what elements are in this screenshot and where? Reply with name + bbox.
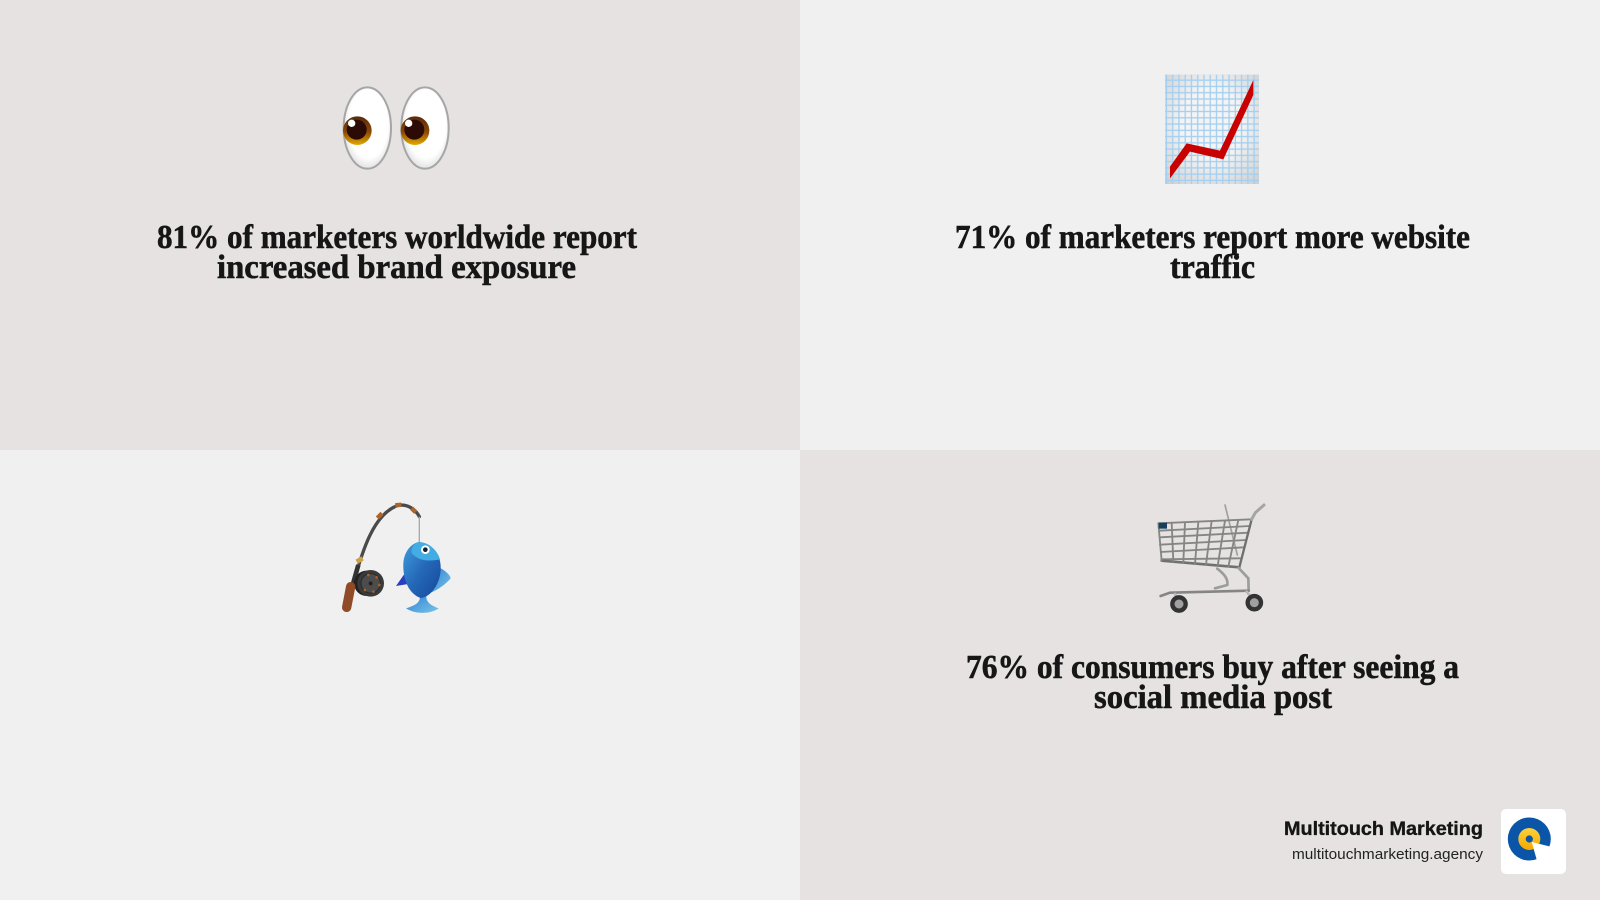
heading: 76% of consumers: social media post [1094,679,1333,716]
brand url: multitouchmarketing.agency [1292,846,1484,863]
heading: 71% of marketers: traffic [1170,249,1255,286]
panel: website traffic [800,0,1600,450]
heading: 71% of marketers: 71% of marketers report more website [955,219,1470,256]
panel: brand exposure [0,0,800,450]
footer: brand [1284,809,1566,874]
icon: chart increasing [1165,75,1259,184]
heading: 81% of marketers [157,219,638,286]
heading: 71% of marketers [955,219,1470,286]
icon: eyes [343,87,449,169]
icon: logo [1501,809,1566,874]
icon: shopping cart [1158,505,1264,611]
heading: 76% of consumers: 76% of consumers buy after seeing a [966,649,1459,686]
panel: purchases [800,450,1600,900]
icon: fishing pole and fish [347,505,451,613]
heading: 81% of marketers: 81% of marketers worldwide report [157,219,638,256]
panel: leads [0,450,800,900]
brand name: Multitouch Marketing [1284,819,1483,840]
heading: 81% of marketers: increased brand exposure [217,249,576,286]
heading: 76% of consumers [966,649,1459,716]
